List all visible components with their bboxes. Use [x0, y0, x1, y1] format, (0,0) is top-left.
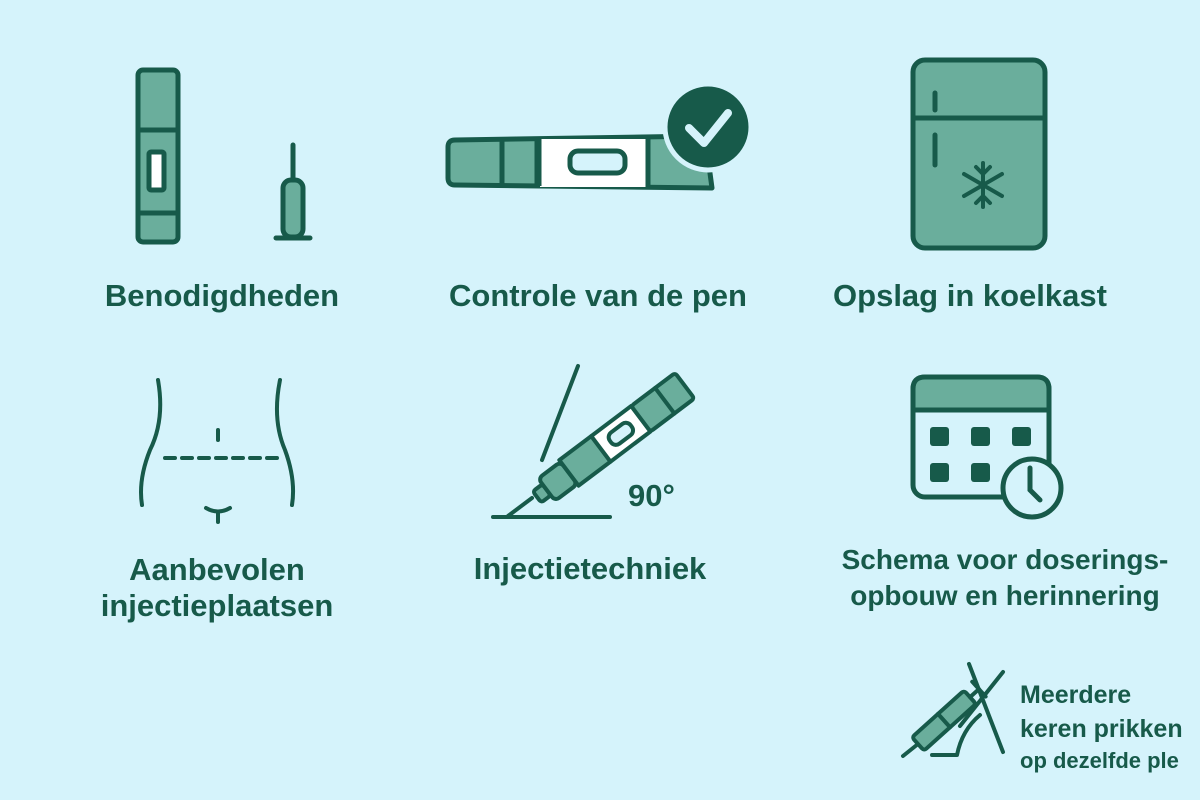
heading: Aanbevolen injectieplaatsen: injectieplaatsen: [101, 588, 333, 623]
icon: pen and needle: [138, 70, 310, 242]
icon: no repeated injection same place: [903, 664, 1003, 756]
heading: Schema voor doseringsopbouw: opbouw en herinnering: [850, 580, 1160, 611]
text: Meerdere keren prikken: op dezelfde ple: [1020, 748, 1179, 773]
text: Meerdere keren prikken: Meerdere: [1020, 681, 1131, 709]
icon: injection technique: [493, 366, 694, 517]
heading: Opslag in koelkast: Opslag in koelkast: [833, 278, 1107, 313]
heading: Aanbevolen injectieplaatsen: Aanbevolen: [129, 552, 305, 587]
heading: Injectietechniek: Injectietechniek: [474, 551, 707, 586]
heading: Benodigdheden: Benodigdheden: [105, 278, 339, 313]
text: Meerdere keren prikken: keren prikken: [1020, 715, 1183, 743]
icon: body injection sites: [141, 380, 293, 522]
icon: pen check: [448, 84, 751, 188]
heading: Schema voor doseringsopbouw: Schema voor doserings-: [842, 544, 1168, 575]
label: 90 degrees: 90°: [628, 478, 675, 513]
icon: calendar with clock: [913, 377, 1061, 517]
heading: Controle van de pen: Controle van de pen: [449, 278, 747, 313]
icon: fridge: [913, 60, 1045, 248]
